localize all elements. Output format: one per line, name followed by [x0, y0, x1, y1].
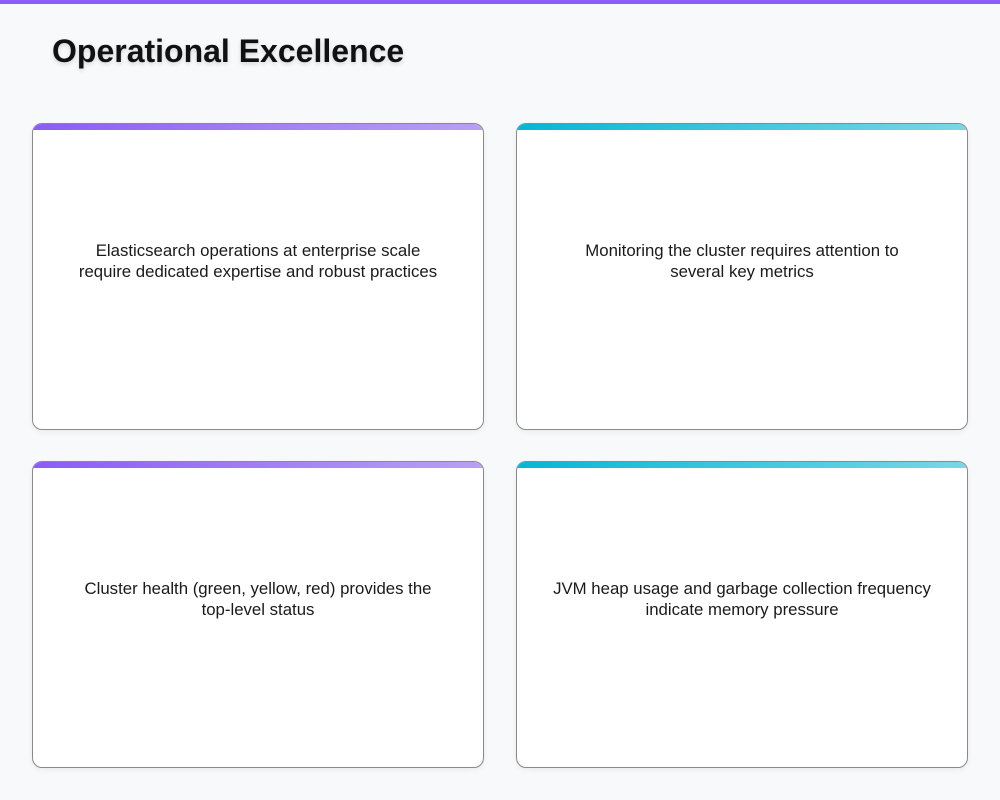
text: monitoring: Monitoring the cluster requires attention to: [585, 240, 899, 260]
accent bar purple: [33, 462, 483, 468]
text: JVM heap: indicate memory pressure: [645, 600, 839, 618]
text: JVM heap: JVM heap usage and garbage collection frequency: [553, 578, 931, 598]
top accent bar: [0, 0, 1000, 4]
text: cluster health: Cluster health (green, yellow, red) provides the: [84, 578, 432, 598]
panel: enterprise scale: [32, 123, 484, 430]
text: cluster health: top-level status: [202, 600, 314, 618]
panel: JVM heap: [516, 461, 968, 768]
panel: monitoring: [516, 123, 968, 430]
text: enterprise scale: Elasticsearch operations at enterprise scale: [96, 240, 420, 260]
text: enterprise scale: [79, 240, 437, 280]
text: monitoring: several key metrics: [670, 262, 814, 280]
accent bar teal: [517, 462, 967, 468]
text: monitoring: [585, 240, 899, 280]
title: Operational Excellence: [52, 33, 404, 69]
accent bar teal: [517, 124, 967, 130]
text: enterprise scale: require dedicated expertise and robust practices: [79, 262, 437, 280]
text: cluster health: [84, 578, 432, 618]
accent bar purple: [33, 124, 483, 130]
text: JVM heap: [553, 578, 931, 618]
panel: cluster health: [32, 461, 484, 768]
